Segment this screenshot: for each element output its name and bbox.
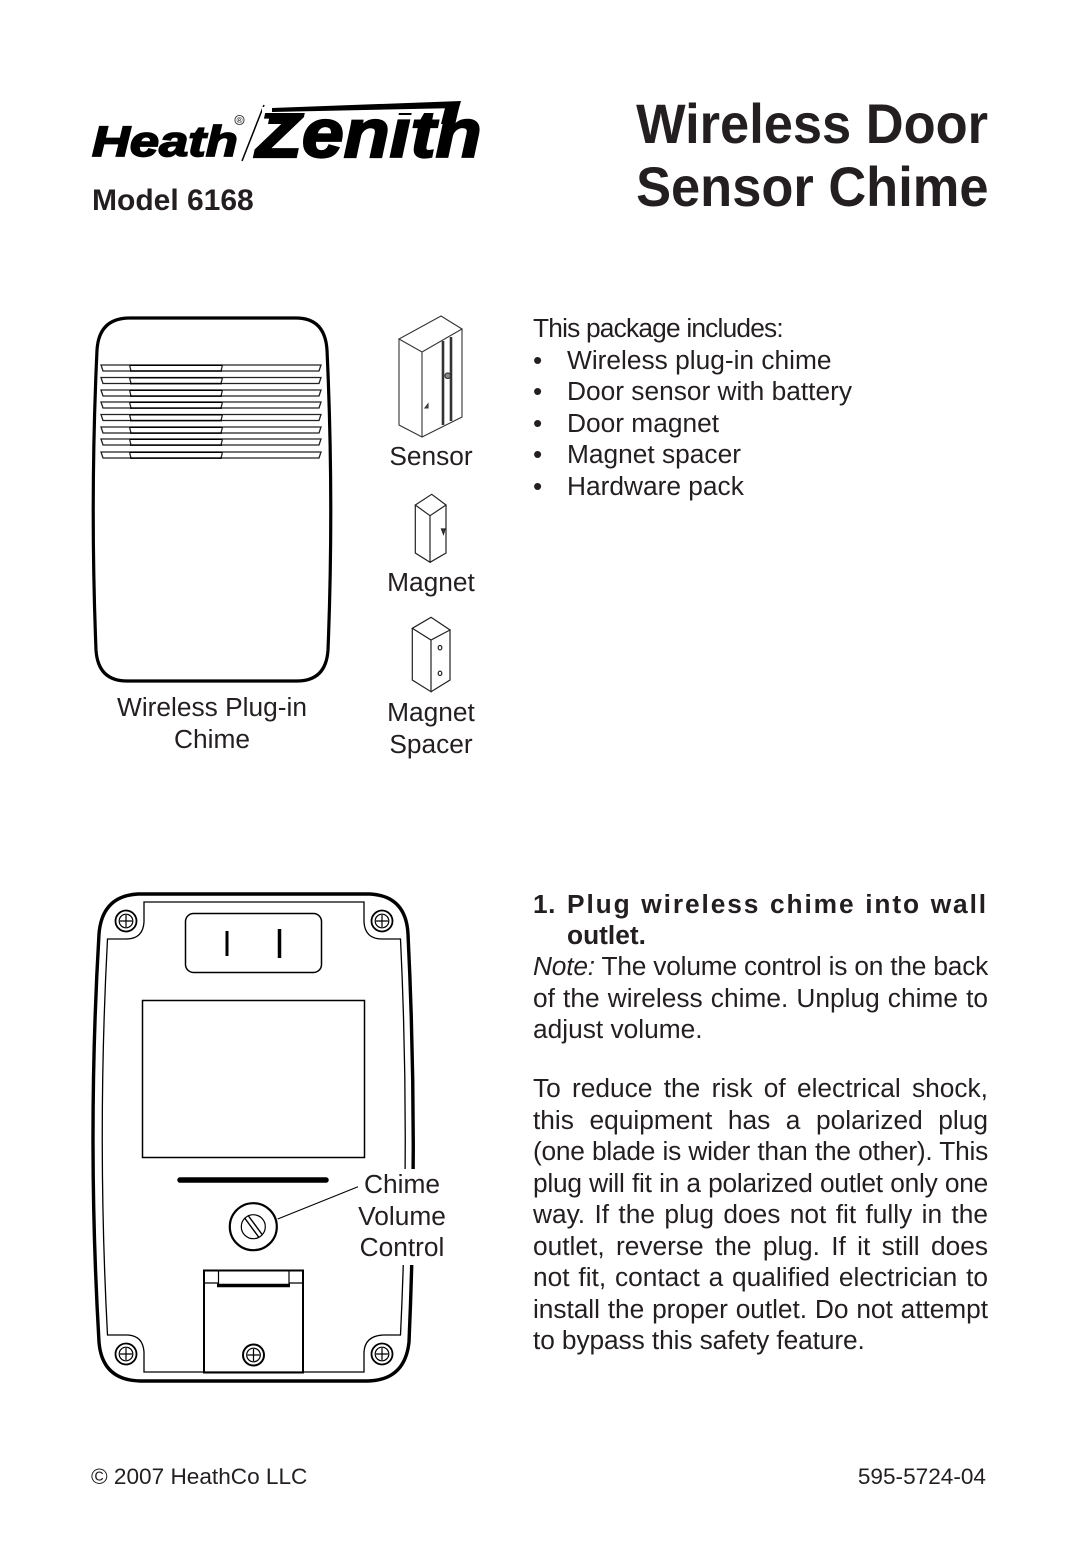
label: magnet spacer: Magnet	[387, 697, 475, 727]
logo: Heath Zenith: Heath	[92, 119, 238, 166]
illustration: magnet	[414, 494, 447, 564]
package includes list	[533, 313, 852, 500]
package includes list: •	[533, 470, 542, 500]
step 1 heading	[533, 889, 988, 950]
label: sensor: Sensor	[389, 441, 473, 471]
model number: Model 6168	[92, 184, 254, 217]
label: wireless plug-in chime: Wireless Plug-in	[117, 692, 307, 722]
step 1 heading: outlet.	[567, 920, 646, 950]
safety text: not fit, contact a qualified electrician to	[533, 1262, 988, 1292]
package includes list: •	[533, 376, 542, 406]
logo: Heath Zenith: Zenith	[254, 96, 482, 172]
label: magnet spacer: Spacer	[389, 728, 473, 758]
footer copyright: © 2007 HeathCo LLC	[91, 1464, 307, 1489]
safety text: outlet, reverse the plug. If it still does	[533, 1230, 988, 1260]
safety text	[533, 1073, 988, 1355]
note text: Note: The volume control is on the back	[533, 951, 988, 981]
label: wireless plug-in chime	[117, 692, 307, 754]
safety text: To reduce the risk of electrical shock,	[533, 1073, 988, 1103]
note text	[533, 951, 988, 1044]
title: Sensor Chime	[636, 155, 989, 218]
label: chime volume control: Chime	[364, 1169, 440, 1199]
package includes list: Magnet spacer	[567, 439, 741, 469]
safety text: way. If the plug does not fit fully in the	[533, 1199, 988, 1229]
logo: Heath Zenith	[92, 96, 482, 172]
illustration: magnet spacer	[411, 616, 451, 693]
step 1 heading: 1.	[533, 889, 556, 919]
package includes list: Wireless plug-in chime	[567, 344, 832, 374]
illustration: sensor	[398, 315, 463, 438]
note text: of the wireless chime. Unplug chime to	[533, 982, 988, 1012]
illustration: wireless plug-in chime front	[92, 316, 332, 683]
label: chime volume control: Volume	[358, 1200, 446, 1230]
safety text: to bypass this safety feature.	[533, 1325, 865, 1355]
title	[636, 92, 989, 218]
label: chime volume control	[358, 1169, 446, 1265]
package includes list: This package includes:	[533, 313, 783, 343]
safety text: install the proper outlet. Do not attempt	[533, 1294, 988, 1324]
label: chime volume control: Control	[360, 1232, 444, 1262]
label: wireless plug-in chime: Chime	[174, 724, 250, 754]
label: magnet spacer	[387, 697, 475, 758]
package includes list: •	[533, 408, 542, 438]
package includes list: •	[533, 344, 542, 374]
title: Wireless Door	[636, 92, 988, 155]
footer part number: 595-5724-04	[858, 1464, 986, 1489]
package includes list: Hardware pack	[567, 470, 744, 500]
label: magnet: Magnet	[387, 567, 475, 597]
package includes list: Door magnet	[567, 408, 719, 438]
package includes list: •	[533, 439, 542, 469]
safety text: plug will fit in a polarized outlet only one	[533, 1168, 988, 1198]
note text: adjust volume.	[533, 1014, 703, 1044]
package includes list: Door sensor with battery	[567, 376, 852, 406]
safety text: this equipment has a polarized plug	[533, 1104, 988, 1134]
step 1 heading: Plug wireless chime into wall	[567, 889, 988, 919]
logo: Heath Zenith: ®	[236, 116, 242, 125]
safety text: (one blade is wider than the other). This	[533, 1136, 988, 1166]
